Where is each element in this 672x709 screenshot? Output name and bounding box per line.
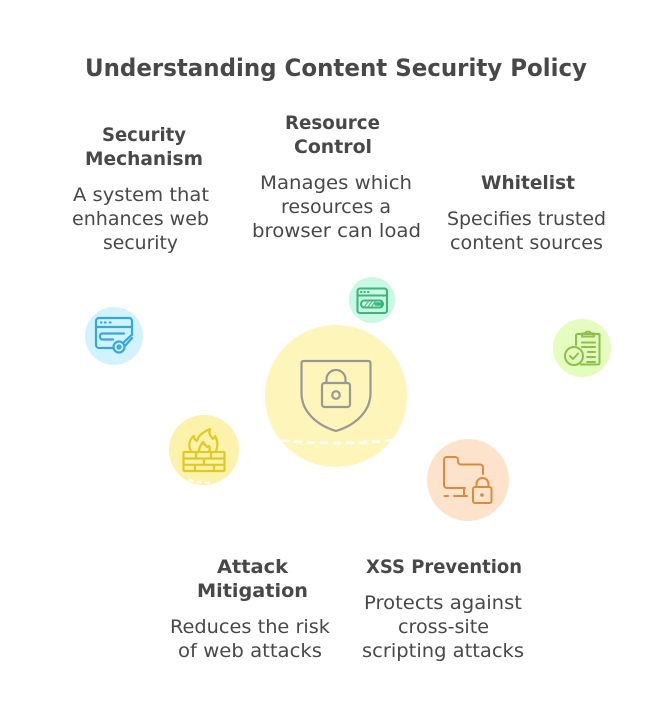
text block: Whitelist: [447, 172, 606, 254]
description: Whitelist: content sources: [450, 232, 603, 254]
icon: attack mitigation firewall: [169, 415, 239, 485]
heading: Attack Mitigation: Attack: [217, 556, 288, 578]
icon: security mechanism window with key: [85, 307, 143, 365]
description: Whitelist: Specifies trusted: [447, 208, 606, 230]
heading: Security Mechanism: [85, 124, 203, 170]
central icon: shield with padlock: [265, 325, 407, 467]
text block: Attack Mitigation: [170, 556, 330, 662]
description: XSS Prevention: scripting attacks: [362, 640, 524, 662]
description: Security Mechanism: enhances web: [72, 208, 209, 230]
description: Resource Control: resources a: [281, 196, 391, 218]
text block: XSS Prevention: [362, 556, 524, 662]
heading: Security Mechanism: Security: [102, 124, 187, 146]
text block: Security Mechanism: [72, 124, 209, 254]
icon: xss prevention folder monitor with lock: [427, 439, 509, 521]
description: Security Mechanism: security: [103, 232, 178, 254]
description: Resource Control: [252, 172, 421, 242]
icon: resource control browser with progress bar: [349, 277, 395, 323]
icon: whitelist clipboard with check: [553, 319, 611, 377]
heading: Attack Mitigation: Mitigation: [197, 580, 308, 602]
description: Security Mechanism: [72, 184, 209, 254]
description: Attack Mitigation: Reduces the risk: [170, 616, 330, 638]
heading: XSS Prevention: XSS Prevention: [366, 556, 522, 578]
heading: Resource Control: Control: [294, 136, 372, 158]
description: XSS Prevention: [362, 592, 524, 662]
heading: Whitelist: Whitelist: [481, 172, 575, 194]
text block: Resource Control: [252, 112, 421, 242]
heading: Security Mechanism: Mechanism: [85, 148, 203, 170]
heading: Resource Control: Resource: [285, 112, 380, 134]
description: Whitelist: [447, 208, 606, 254]
description: Attack Mitigation: [170, 616, 330, 662]
heading: Resource Control: [285, 112, 380, 158]
heading: Attack Mitigation: [197, 556, 308, 602]
title: Understanding Content Security Policy: [85, 54, 587, 82]
description: XSS Prevention: Protects against: [364, 592, 522, 614]
description: Resource Control: browser can load: [252, 220, 421, 242]
description: Resource Control: Manages which: [260, 172, 412, 194]
description: Security Mechanism: A system that: [73, 184, 209, 206]
description: XSS Prevention: cross-site: [398, 616, 489, 638]
description: Attack Mitigation: of web attacks: [178, 640, 322, 662]
